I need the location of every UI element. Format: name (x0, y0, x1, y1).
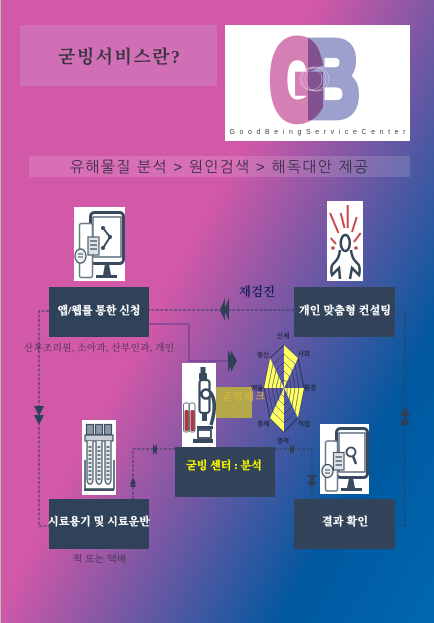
icon: microscope and blood tubes (182, 363, 216, 447)
connector: consulting back to app request, re-examination (149, 298, 294, 321)
radar chart: 영적 (277, 437, 289, 445)
subtitle bar: 유해물질 분석 > 원인검색 > 해독대안 제공 (70, 159, 368, 176)
title panel: 굳빙서비스란? (58, 46, 180, 67)
box: check results (294, 499, 395, 549)
radar chart: 환경 (304, 384, 316, 392)
logo: G (271, 20, 323, 140)
subtitle bar (29, 156, 410, 177)
box: personal consulting: 개인 맞춤형 컨설팅 (299, 303, 391, 317)
radar chart: 경제 (257, 420, 269, 428)
logo (225, 18, 410, 141)
logo: B (306, 18, 359, 139)
radar chart: 사회 (298, 350, 310, 358)
box: sample containers and transport: 시료용기 및 시료운반 (48, 514, 150, 528)
radar chart: 직업 (298, 420, 310, 428)
icon: monitor with app (74, 207, 125, 281)
box: check results: 결과 확인 (322, 514, 368, 528)
text: client types: 산후조리원, 소아과, 산부인과, 개인 (24, 342, 174, 354)
box: analysis center (175, 447, 275, 497)
box: app and web request: 앱/웹를 통한 신청 (58, 303, 140, 317)
box: sample containers and transport (48, 499, 150, 549)
radar chart: 정신 (257, 351, 269, 359)
icon: sample tubes in rack (82, 420, 116, 495)
box: analysis center: 굳빙 센터 : 분석 (186, 458, 262, 472)
callout: good being check (216, 387, 265, 418)
radar chart (251, 332, 316, 445)
icon: person with rays (327, 201, 363, 281)
label: re-examination: 재검진 (239, 284, 275, 299)
text: courier: 퀵 또는 택배 (73, 553, 126, 565)
title panel (20, 25, 217, 86)
box: personal consulting (294, 287, 395, 337)
connector: results to consulting (395, 312, 410, 526)
connector: analysis center to results (275, 444, 317, 499)
box: app and web request (49, 287, 149, 337)
connector: sample transport to analysis center (130, 444, 175, 499)
connector: app request to analysis chart (149, 324, 237, 372)
callout: good being check: 굳빙체크 (222, 390, 265, 403)
radar chart: 예술 (251, 384, 263, 392)
radar chart: 신체 (277, 332, 289, 340)
icon: monitor with magnifier (320, 424, 369, 494)
connector: app request to sample transport (34, 311, 49, 526)
logo: GoodBeingServiceCenter (230, 129, 406, 136)
